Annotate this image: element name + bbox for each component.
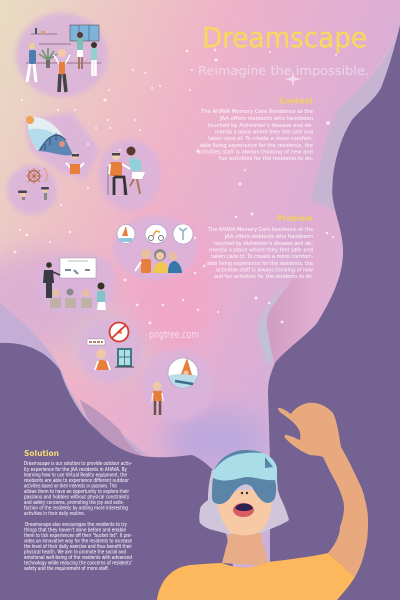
solution body: Dreamscape also encourages the residents to try bbox=[25, 522, 127, 528]
context body: The AHAVA Memory Care Residence at the bbox=[200, 109, 313, 115]
problem body: mentia a place where they feel safe and bbox=[209, 248, 313, 254]
solution heading: Solution bbox=[24, 449, 59, 458]
solution body: safety and the requirement of more staff. bbox=[24, 566, 109, 572]
solution body: allows them to have an opportunity to explore their bbox=[24, 489, 130, 495]
neck bbox=[222, 530, 270, 566]
solution body: physical health. We aim to promote the social and bbox=[24, 550, 126, 556]
problem body: able living experience for the residents, the bbox=[207, 261, 313, 267]
solution body: the level of their daily exercise and thus benefit their bbox=[24, 544, 133, 550]
solution body: activities in their daily routine. bbox=[24, 511, 85, 517]
problem body: The AHAVA Memory Care Residence at the bbox=[207, 227, 313, 233]
problem heading: Problem bbox=[277, 214, 313, 223]
problem body: activities staff is always thinking of new bbox=[216, 268, 313, 274]
context body: taken care of. To create a more comfort- bbox=[208, 136, 313, 142]
mouth bbox=[233, 503, 254, 517]
context body: activities staff is always thinking of new and bbox=[197, 150, 313, 156]
illustration: resident seated with carer bbox=[108, 146, 145, 195]
arm and hand bbox=[278, 403, 368, 577]
problem body: and fun activities for the residents to do. bbox=[214, 274, 313, 280]
illustration: residents trying VR with staff bbox=[26, 25, 101, 92]
nose bbox=[241, 492, 248, 494]
shirt bbox=[157, 553, 355, 600]
context body: JAA offers residents who havebeen bbox=[219, 116, 313, 122]
context body: touched by Alzheimer's disease and de- bbox=[208, 123, 313, 129]
solution body: technology while reducing the concerns of residents' bbox=[24, 560, 132, 566]
problem section bbox=[207, 214, 313, 280]
watermark: pngtree.com bbox=[149, 329, 199, 341]
stars bbox=[14, 49, 337, 324]
solution body: things that they haven't done before and enable bbox=[24, 528, 126, 534]
problem body bbox=[207, 227, 313, 280]
purple dream edge, right bbox=[268, 25, 400, 600]
solution body: faction of the residents by adding more interesting bbox=[24, 506, 128, 512]
illustration: VR training presentation bbox=[43, 258, 106, 310]
solution body: emotional well-being of the residents with advanced bbox=[24, 555, 132, 561]
illustration: VR ship scene bbox=[26, 116, 84, 174]
problem body: taken care of. To create a more comfort- bbox=[211, 254, 313, 260]
solution body: learning how to use Virtual Reality equipment, the bbox=[24, 472, 127, 478]
solution body: activities based on their interests or passions. This bbox=[24, 484, 117, 490]
VR headset bbox=[212, 450, 277, 504]
context body: able living experience for the residents, the bbox=[200, 143, 313, 149]
problem body: JAA offers residents who havebeen bbox=[224, 234, 313, 240]
mint edge glow bbox=[263, 292, 285, 362]
title: Dreamscape bbox=[202, 21, 367, 54]
face bbox=[215, 490, 272, 536]
context body bbox=[197, 109, 313, 162]
solution body: Dreamscape is our solution to provide outdoor activ- bbox=[24, 461, 132, 467]
person wearing VR headset bbox=[157, 403, 368, 600]
hair bbox=[199, 470, 289, 534]
solution body: and safety concerns, promoting the joy and satis- bbox=[24, 500, 124, 506]
solution body: passions and hobbies without physical constraints bbox=[24, 494, 129, 500]
context section bbox=[197, 96, 313, 162]
lavender band, lower left bbox=[0, 303, 150, 458]
solution body: residents are able to experience different outdoor bbox=[24, 478, 130, 484]
problem body: touched by Alzheimer's disease and de- bbox=[214, 241, 313, 247]
pink fold bbox=[267, 25, 400, 364]
star burst bbox=[285, 70, 301, 88]
solution body: ity experience for the JAA residents in AHAVA. By bbox=[24, 467, 127, 473]
subtitle: Reimagine the impossible. bbox=[198, 63, 369, 78]
illustration: resident wishes with no-go sign and window bbox=[87, 322, 134, 370]
context heading: Context bbox=[279, 96, 313, 106]
context body: fun activities for the residents to do. bbox=[219, 156, 313, 162]
illustration: wheel and VR users bbox=[18, 168, 49, 200]
lavender veil bbox=[310, 25, 400, 210]
illustration halos bbox=[7, 13, 214, 421]
context body: mentia a place where they feel safe and bbox=[215, 130, 313, 136]
solution body bbox=[24, 461, 133, 572]
illustration: resident imagining windsurfing bbox=[152, 358, 198, 415]
solution section bbox=[24, 449, 133, 572]
solution body: them to tick experiences off their "bucket list". It pro- bbox=[24, 533, 132, 539]
illustration: thought bubbles of three residents bbox=[117, 224, 193, 273]
solution body: vides an innovative way for the residents to increase bbox=[24, 538, 132, 544]
purple ground, lower left bbox=[0, 343, 240, 600]
mauve band, lower left bbox=[80, 400, 145, 457]
